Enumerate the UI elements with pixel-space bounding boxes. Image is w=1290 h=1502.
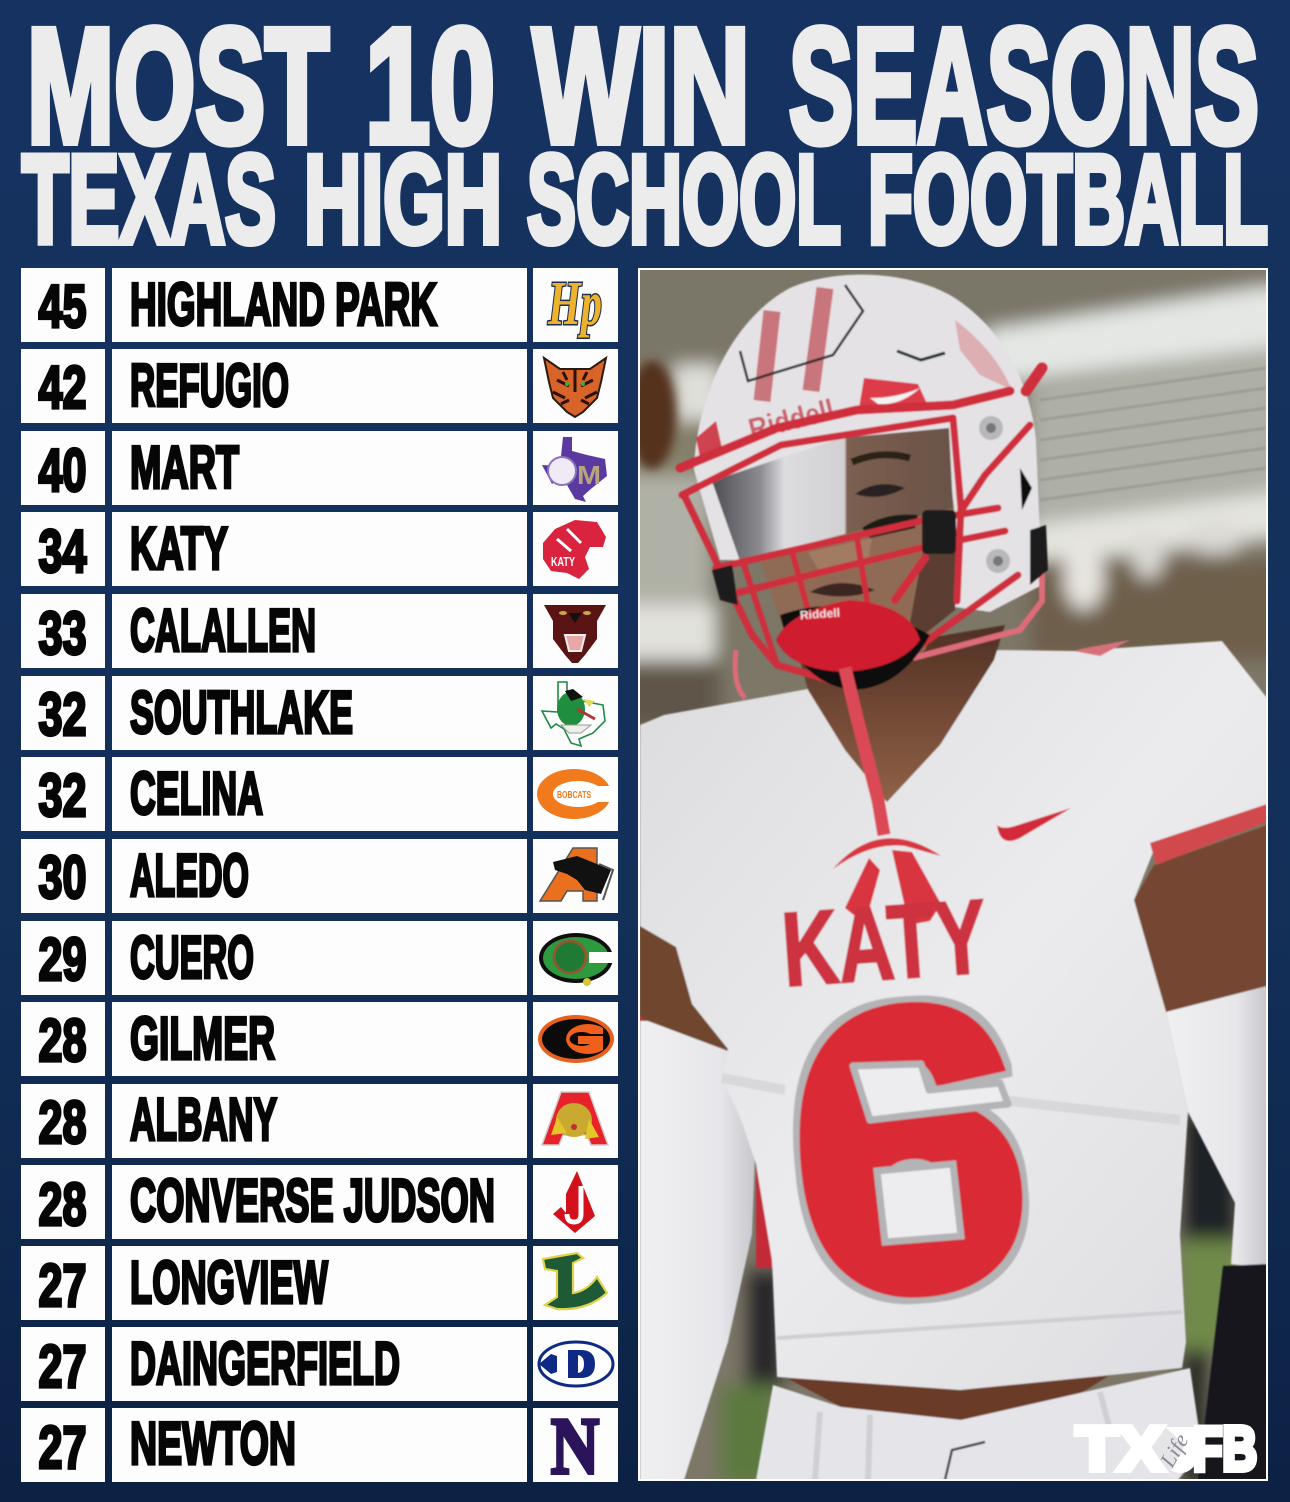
title line 2: SCHOOL — [527, 130, 841, 270]
waist skin — [781, 1375, 1110, 1420]
school name: HIGHLAND PARK — [130, 271, 437, 338]
helmet stripes and hex — [762, 288, 825, 401]
icon: Judson J spear — [553, 1171, 595, 1233]
score: 32 — [38, 681, 86, 748]
icon: Mart logo: M — [577, 460, 601, 490]
icon: Newton N: N — [551, 1403, 599, 1491]
nose and mouth — [808, 538, 872, 572]
arm sleeve left — [640, 1021, 755, 1480]
icon: Refugio bobcat — [544, 358, 606, 417]
icon: Aledo A mustang — [540, 848, 613, 901]
school name: CUERO — [130, 924, 254, 991]
neck — [800, 625, 1005, 802]
TXFB logo: Life — [1154, 1429, 1194, 1472]
arm sleeve right — [1166, 986, 1267, 1268]
row: Highland Park — [21, 268, 618, 342]
player right arm — [1134, 825, 1267, 1012]
icon: Albany A lion — [542, 1092, 608, 1145]
mouthguard strap — [845, 668, 884, 835]
row: Longview — [21, 1246, 618, 1320]
ranking table — [21, 268, 618, 1491]
helmet bolts and clips — [922, 510, 956, 554]
jersey number 6: 6 — [774, 919, 1044, 1380]
icon: Calallen wildcat — [544, 605, 606, 663]
score: 27 — [38, 1333, 86, 1400]
row: Aledo — [21, 839, 618, 913]
title line 2 — [22, 130, 1268, 270]
icon: Celina C logo — [537, 769, 615, 819]
school name: GILMER — [130, 1005, 275, 1072]
chin strap — [913, 565, 1042, 658]
score: 28 — [38, 1007, 86, 1074]
row: Celina — [21, 757, 618, 831]
row: Katy — [21, 512, 618, 586]
score: 33 — [38, 600, 86, 667]
school name: DAINGERFIELD — [130, 1330, 400, 1397]
school name: SOUTHLAKE — [130, 679, 353, 746]
icon: Celina C logo: BOBCATS — [557, 790, 591, 801]
school name: MART — [130, 434, 239, 501]
score: 27 — [38, 1252, 86, 1319]
title line 2: TEXAS — [22, 130, 276, 270]
score: 30 — [38, 844, 86, 911]
jersey swoosh — [997, 808, 1071, 841]
school name: LONGVIEW — [130, 1249, 328, 1316]
score: 32 — [38, 762, 86, 829]
row: Mart — [21, 431, 618, 505]
player left arm — [640, 926, 728, 1060]
row: Daingerfield — [21, 1327, 618, 1401]
score: 34 — [38, 518, 87, 585]
school name: NEWTON — [130, 1410, 296, 1477]
row: Cuero — [21, 921, 618, 995]
row: Converse Judson — [21, 1165, 618, 1239]
score: 28 — [38, 1171, 86, 1238]
red behind left arm — [640, 1000, 780, 1268]
row: Refugio — [21, 349, 618, 423]
pants — [756, 1368, 1202, 1480]
icon: Highland Park logo: Hp — [547, 270, 602, 338]
icon: Daingerfield D — [539, 1342, 613, 1386]
jersey text KATY: KATY — [778, 878, 990, 1009]
school name: CALALLEN — [130, 597, 316, 664]
row: Newton — [21, 1403, 618, 1491]
score: 29 — [38, 926, 86, 993]
school name: CONVERSE JUDSON — [130, 1167, 495, 1234]
helmet — [694, 275, 1042, 612]
helmet brand text: Riddell — [745, 394, 838, 447]
score: 42 — [38, 354, 86, 421]
score: 40 — [38, 437, 86, 504]
icon: Cuero gobbler C — [539, 933, 613, 986]
wrist brace — [1198, 1264, 1267, 1480]
school name: ALEDO — [130, 842, 249, 909]
photo panel: Katy football player: Riddell — [799, 606, 840, 622]
blurred football — [628, 361, 676, 469]
visor — [712, 428, 953, 561]
icon: Southlake dragon in Texas — [542, 682, 605, 746]
title line 2: HIGH — [304, 130, 502, 270]
school name: KATY — [130, 515, 228, 582]
blurred stadium background — [620, 250, 1290, 1500]
icon: Longview L — [543, 1253, 607, 1309]
TXFB logo — [1074, 1424, 1258, 1474]
score: 27 — [38, 1414, 86, 1481]
TXFB logo: FB — [1193, 1415, 1257, 1484]
icon: Mart logo — [542, 437, 607, 502]
score: 45 — [38, 273, 86, 340]
hanging mouthguard — [833, 838, 941, 925]
row: Southlake — [21, 676, 618, 750]
title — [22, 0, 1268, 270]
photo panel: Katy football player — [620, 250, 1290, 1500]
icon: Katy tiger: KATY — [551, 554, 575, 569]
TXFB logo: TX — [1076, 1415, 1164, 1484]
school name: REFUGIO — [130, 352, 289, 419]
school name: ALBANY — [130, 1086, 277, 1153]
jersey number 6 — [792, 994, 1030, 1305]
jersey — [640, 641, 1267, 1390]
chin cup and mouthguard — [780, 606, 930, 690]
row: Gilmer — [21, 1002, 618, 1076]
school name: CELINA — [130, 760, 263, 827]
icon: Katy tiger — [543, 520, 606, 579]
face — [760, 492, 958, 690]
row: Calallen — [21, 594, 618, 668]
score: 28 — [38, 1089, 86, 1156]
blurred stand stripes — [1040, 368, 1266, 500]
icon: Gilmer G — [538, 1015, 614, 1063]
title line 1 — [27, 0, 1259, 177]
jersey number counters — [877, 1164, 961, 1242]
sleeve stripe — [1150, 804, 1267, 865]
eye black — [862, 515, 918, 538]
row: Albany — [21, 1084, 618, 1158]
facemask — [680, 368, 1042, 681]
